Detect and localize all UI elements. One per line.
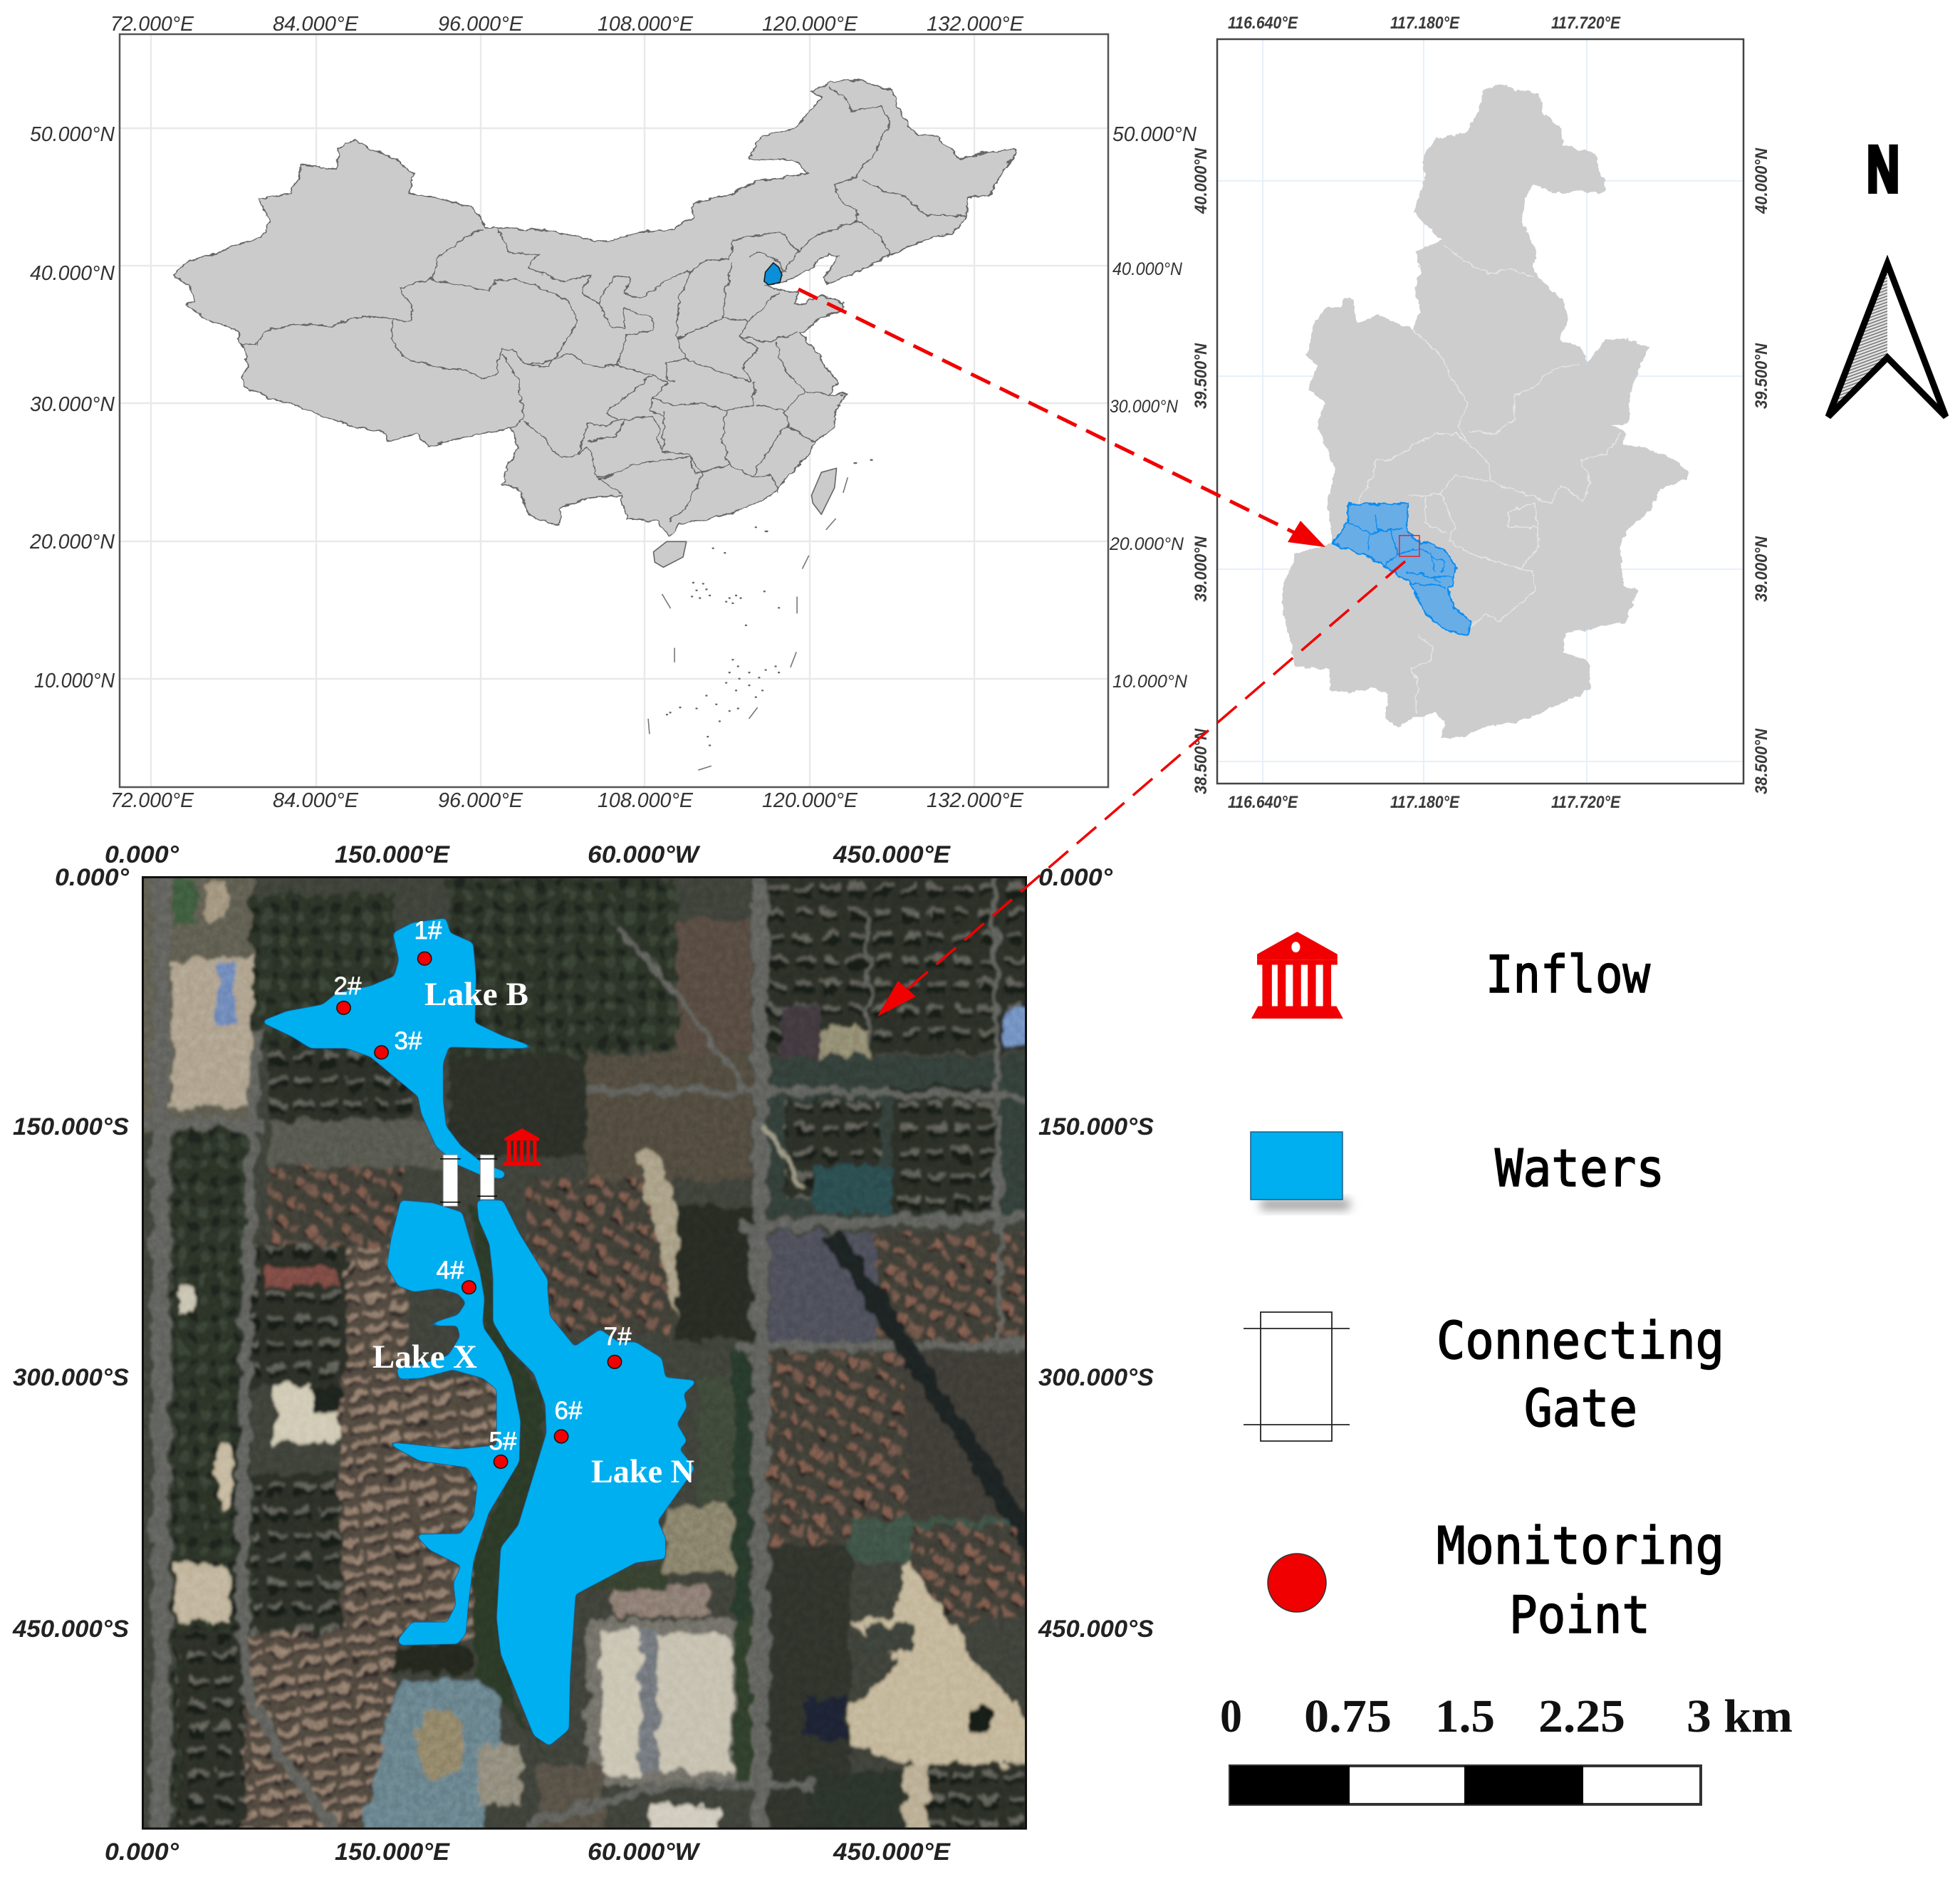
China map right latitude labels: 10.000°N: [1112, 672, 1188, 692]
Taiwan island: [811, 468, 837, 514]
scale bar labels: 2.25: [1538, 1690, 1625, 1742]
Lake B: [261, 919, 536, 1178]
China map bottom longitude labels: 132.000°E: [927, 789, 1024, 812]
legend: inflow icon: [1251, 932, 1343, 1019]
China map frame: [120, 34, 1108, 787]
satellite imagery background: [131, 864, 1038, 1841]
lake map right axis labels: 150.000°S: [1038, 1113, 1154, 1140]
connecting gates on map: [440, 1155, 497, 1206]
arrow: China to Tianjin: [798, 289, 1325, 547]
scale bar labels: 0: [1220, 1690, 1242, 1742]
China map graticule: [120, 34, 1108, 787]
panel: Tianjin map: [1192, 14, 1771, 812]
China map bottom longitude labels: 108.000°E: [598, 789, 694, 812]
China map top longitude labels: 120.000°E: [762, 13, 858, 36]
Tianjin bottom longitude labels: 116.640°E: [1228, 793, 1298, 812]
legend: monitoring point symbol: [1268, 1554, 1326, 1612]
monitoring points on map: [337, 952, 622, 1468]
lake name labels: Lake N: [591, 1453, 694, 1490]
legend: gate symbol: [1244, 1312, 1350, 1441]
Tianjin top longitude labels: 117.180°E: [1390, 14, 1460, 33]
legend: connecting gate label: Connecting: [1437, 1311, 1724, 1371]
monitoring point labels: 1#: [415, 917, 442, 945]
Tianjin top longitude labels: 116.640°E: [1228, 14, 1298, 33]
Tianjin map graticule: [1217, 40, 1743, 784]
legend: connecting gate label: [1437, 1311, 1724, 1438]
South China Sea dashes and islands: [648, 477, 848, 770]
China map bottom longitude labels: [110, 789, 1024, 812]
panel: lake satellite map: [12, 841, 1154, 1866]
legend: monitoring point label: Monitoring: [1437, 1516, 1724, 1576]
China map top longitude labels: 84.000°E: [273, 13, 359, 36]
China map left latitude labels: 30.000°N: [30, 393, 115, 416]
lake map left axis labels: 300.000°S: [13, 1364, 129, 1391]
Lake N: [477, 1201, 697, 1745]
lake map top axis labels: 150.000°E: [335, 841, 450, 868]
Tianjin highlighted districts: [1333, 503, 1471, 636]
lake water bodies: [261, 919, 697, 1745]
China map top longitude labels: 132.000°E: [927, 13, 1024, 36]
Tianjin left latitude labels: [1192, 147, 1211, 794]
panel: legend: [1220, 932, 1793, 1804]
Tianjin top longitude labels: [1228, 14, 1621, 33]
scale bar labels: 0.75: [1304, 1690, 1392, 1742]
China outline with provinces: [172, 80, 1017, 770]
Tianjin right latitude labels: 38.500°N: [1752, 728, 1771, 794]
arrow: Tianjin to lake map: [877, 561, 1405, 1017]
lake map top axis labels: 60.000°W: [588, 841, 701, 868]
China map left latitude labels: 40.000°N: [30, 262, 115, 285]
China map top longitude labels: 96.000°E: [438, 13, 523, 36]
lake name labels: Lake B: [424, 976, 528, 1013]
Tianjin left latitude labels: 39.000°N: [1192, 536, 1211, 602]
lake map bottom axis labels: 60.000°W: [588, 1839, 701, 1866]
Hainan island: [654, 541, 687, 567]
lake map bottom axis labels: 450.000°E: [833, 1839, 951, 1866]
monitoring point labels: 6#: [555, 1397, 583, 1425]
lake map right axis labels: [1038, 864, 1154, 1643]
legend: waters swatch: [1251, 1132, 1350, 1210]
Tianjin right latitude labels: 39.500°N: [1752, 343, 1771, 409]
Lake X: [387, 1201, 520, 1645]
China map bottom longitude labels: 72.000°E: [110, 789, 194, 812]
China map top longitude labels: 72.000°E: [110, 13, 194, 36]
lake name labels: Lake X: [372, 1338, 477, 1376]
China map top longitude labels: [110, 13, 1024, 36]
lake map left axis labels: 150.000°S: [13, 1113, 129, 1140]
north label: N: [1867, 133, 1899, 206]
Red study-area square: [1399, 536, 1419, 556]
China map left latitude labels: 20.000°N: [29, 531, 115, 553]
China map left latitude labels: 50.000°N: [30, 123, 115, 146]
scale bar: [1230, 1766, 1701, 1804]
monitoring point labels: [334, 917, 632, 1455]
Tianjin map frame: [1217, 39, 1743, 784]
Tianjin bottom longitude labels: 117.720°E: [1551, 793, 1621, 812]
panel: China map: [29, 13, 1197, 812]
lake map top axis labels: 0.000°: [105, 841, 179, 868]
China map top longitude labels: 108.000°E: [598, 13, 694, 36]
China map right latitude labels: 30.000°N: [1110, 397, 1179, 417]
China map bottom longitude labels: 96.000°E: [438, 789, 523, 812]
monitoring point labels: 5#: [489, 1428, 517, 1455]
lake map right axis labels: 450.000°S: [1038, 1616, 1154, 1643]
icon: inflow on map: [502, 1128, 542, 1166]
legend: connecting gate label: Gate: [1524, 1378, 1637, 1438]
China map left latitude labels: 10.000°N: [34, 670, 115, 692]
legend: waters label: Waters: [1495, 1138, 1664, 1198]
lake map bottom axis labels: [105, 1839, 951, 1866]
Tianjin location highlight: [764, 263, 782, 285]
monitoring point labels: 4#: [437, 1257, 464, 1284]
legend: monitoring point label: [1437, 1516, 1724, 1645]
monitoring point labels: 2#: [334, 972, 362, 1000]
Tianjin left latitude labels: 40.000°N: [1192, 147, 1211, 214]
lake map top axis labels: 450.000°E: [833, 841, 951, 868]
legend: monitoring point label: Point: [1509, 1585, 1650, 1645]
lake map frame: [142, 878, 1026, 1829]
Tianjin right latitude labels: [1752, 147, 1771, 794]
China map bottom longitude labels: 84.000°E: [273, 789, 359, 812]
China map right latitude labels: [1109, 123, 1197, 692]
lake map right axis labels: 0.000°: [1038, 864, 1112, 891]
China map left latitude labels: [29, 123, 115, 692]
China map right latitude labels: 50.000°N: [1112, 123, 1197, 146]
monitoring point labels: 7#: [604, 1323, 632, 1351]
scale bar labels: 3 km: [1687, 1690, 1793, 1742]
lake map right axis labels: 300.000°S: [1038, 1364, 1154, 1391]
icon: north arrow: [1828, 264, 1946, 417]
monitoring point labels: 3#: [395, 1027, 422, 1055]
lake map bottom axis labels: 0.000°: [105, 1839, 179, 1866]
Tianjin top longitude labels: 117.720°E: [1551, 14, 1621, 33]
Tianjin bottom longitude labels: [1228, 793, 1621, 812]
lake map bottom axis labels: 150.000°E: [335, 1839, 450, 1866]
Tianjin left latitude labels: 38.500°N: [1192, 728, 1211, 794]
scale bar labels: 1.5: [1435, 1690, 1495, 1742]
lake map left axis labels: 0.000°: [55, 864, 129, 891]
lake map top axis labels: [105, 841, 951, 868]
Tianjin right latitude labels: 40.000°N: [1752, 147, 1771, 214]
Tianjin right latitude labels: 39.000°N: [1752, 536, 1771, 602]
Tianjin district boundaries: [1358, 246, 1620, 713]
China map bottom longitude labels: 120.000°E: [762, 789, 858, 812]
lake name labels: [372, 976, 694, 1490]
lake map left axis labels: 450.000°S: [12, 1616, 129, 1643]
Tianjin left latitude labels: 39.500°N: [1192, 343, 1211, 409]
Tianjin bottom longitude labels: 117.180°E: [1390, 793, 1460, 812]
China map right latitude labels: 20.000°N: [1109, 534, 1184, 554]
scale bar labels: [1220, 1690, 1793, 1742]
Tianjin outline with districts: [1283, 83, 1688, 738]
China map right latitude labels: 40.000°N: [1112, 259, 1183, 279]
legend: inflow label: Inflow: [1486, 945, 1651, 1004]
lake map left axis labels: [12, 864, 129, 1643]
